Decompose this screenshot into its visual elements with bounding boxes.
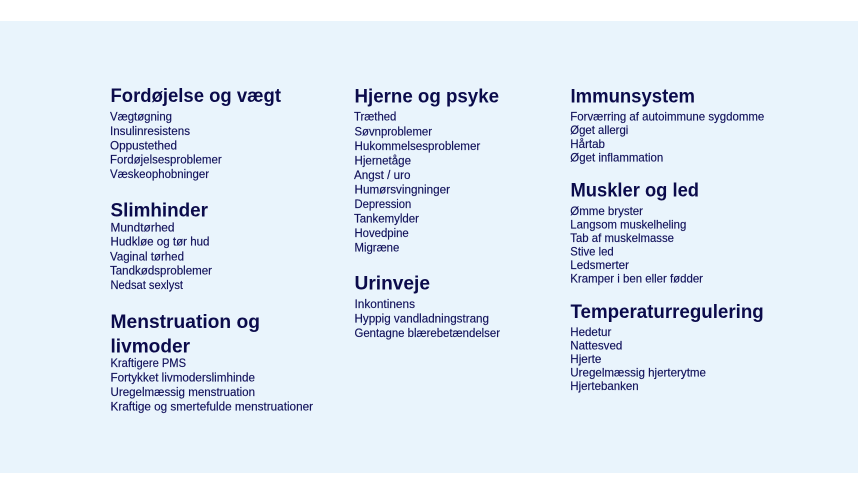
- list: menstruation symptoms: Kraftigere PMS: [110, 356, 186, 370]
- list: immune symptoms: Forværring af autoimmune sygdomme: [570, 110, 765, 124]
- list: brain and mental symptoms: Migræne: [354, 240, 400, 254]
- list: temperature and heart symptoms: Uregelmæssig hjerterytme: [570, 366, 706, 380]
- list: mucous membrane symptoms: [110, 220, 212, 292]
- list: muscle and joint symptoms: Ømme bryster: [570, 204, 643, 218]
- list: muscle and joint symptoms: Kramper i ben eller fødder: [570, 272, 703, 286]
- section: Slimhinder: [110, 200, 212, 292]
- list: temperature and heart symptoms: Hjerte: [570, 352, 602, 366]
- list: menstruation symptoms: Kraftige og smertefulde menstruationer: [110, 399, 313, 413]
- section: Hjerne og psyke: [354, 86, 499, 254]
- heading: Fordøjelse og vægt: Fordøjelse og vægt: [110, 85, 281, 107]
- list: brain and mental symptoms: [354, 110, 480, 254]
- heading: Muskler og led: Muskler og led: [570, 180, 699, 202]
- list: brain and mental symptoms: Hjernetåge: [354, 153, 411, 167]
- heading: Menstruation og livmoder: [110, 311, 260, 357]
- list: muscle and joint symptoms: Tab af muskelmasse: [570, 231, 674, 245]
- list: temperature and heart symptoms: Nattesved: [570, 338, 622, 352]
- heading: Menstruation og livmoder: Menstruation og: [110, 311, 260, 333]
- section: Temperaturregulering: [570, 301, 764, 393]
- list: muscle and joint symptoms: [570, 204, 703, 286]
- list: menstruation symptoms: Uregelmæssig menstruation: [110, 385, 255, 399]
- list: urinary symptoms: Gentagne blærebetændelser: [354, 326, 500, 340]
- list: mucous membrane symptoms: Vaginal tørhed: [110, 249, 184, 263]
- list: immune symptoms: Hårtab: [570, 137, 605, 151]
- list: brain and mental symptoms: Søvnproblemer: [354, 124, 432, 138]
- section: Urinveje: [354, 273, 500, 340]
- heading: Hjerne og psyke: Hjerne og psyke: [354, 86, 499, 108]
- list: digestion symptoms: [110, 110, 222, 181]
- list: temperature and heart symptoms: [570, 325, 706, 393]
- list: muscle and joint symptoms: Langsom muskelheling: [570, 218, 686, 232]
- list: brain and mental symptoms: Hovedpine: [354, 226, 409, 240]
- list: brain and mental symptoms: Hukommelsesproblemer: [354, 139, 480, 153]
- list: urinary symptoms: Hyppig vandladningstrang: [354, 312, 489, 326]
- list: digestion symptoms: Fordøjelsesproblemer: [110, 153, 222, 167]
- heading: Immunsystem: Immunsystem: [570, 86, 695, 108]
- list: mucous membrane symptoms: Nedsat sexlyst: [110, 278, 184, 292]
- list: immune symptoms: [570, 110, 765, 165]
- list: brain and mental symptoms: Depression: [354, 197, 411, 211]
- section: Muskler og led: [570, 180, 703, 286]
- list: brain and mental symptoms: Angst / uro: [354, 168, 411, 182]
- section: Menstruation og livmoder: [110, 311, 313, 413]
- list: urinary symptoms: [354, 297, 500, 340]
- list: menstruation symptoms: [110, 356, 313, 413]
- section: Fordøjelse og vægt: [110, 85, 281, 181]
- heading: Urinveje: Urinveje: [354, 273, 430, 295]
- heading: Slimhinder: Slimhinder: [110, 200, 208, 222]
- list: mucous membrane symptoms: Tandkødsproblemer: [110, 264, 212, 278]
- list: digestion symptoms: Insulinresistens: [110, 124, 190, 138]
- list: immune symptoms: Øget inflammation: [570, 151, 663, 165]
- list: temperature and heart symptoms: Hedetur: [570, 325, 611, 339]
- section: Immunsystem: [570, 86, 765, 165]
- list: brain and mental symptoms: Tankemylder: [354, 211, 419, 225]
- list: mucous membrane symptoms: Hudkløe og tør hud: [110, 235, 210, 249]
- list: brain and mental symptoms: Træthed: [354, 110, 396, 124]
- list: mucous membrane symptoms: Mundtørhed: [110, 220, 174, 234]
- heading: Temperaturregulering: Temperaturregulering: [570, 301, 764, 323]
- list: muscle and joint symptoms: Ledsmerter: [570, 258, 629, 272]
- list: temperature and heart symptoms: Hjertebanken: [570, 379, 639, 393]
- list: muscle and joint symptoms: Stive led: [570, 245, 614, 259]
- list: digestion symptoms: Oppustethed: [110, 138, 177, 152]
- list: brain and mental symptoms: Humørsvingninger: [354, 182, 450, 196]
- list: digestion symptoms: Væskeophobninger: [110, 167, 209, 181]
- list: menstruation symptoms: Fortykket livmoderslimhinde: [110, 370, 255, 384]
- list: urinary symptoms: Inkontinens: [354, 297, 415, 311]
- heading: Menstruation og livmoder: livmoder: [110, 335, 190, 357]
- list: immune symptoms: Øget allergi: [570, 123, 628, 137]
- list: digestion symptoms: Vægtøgning: [110, 110, 172, 124]
